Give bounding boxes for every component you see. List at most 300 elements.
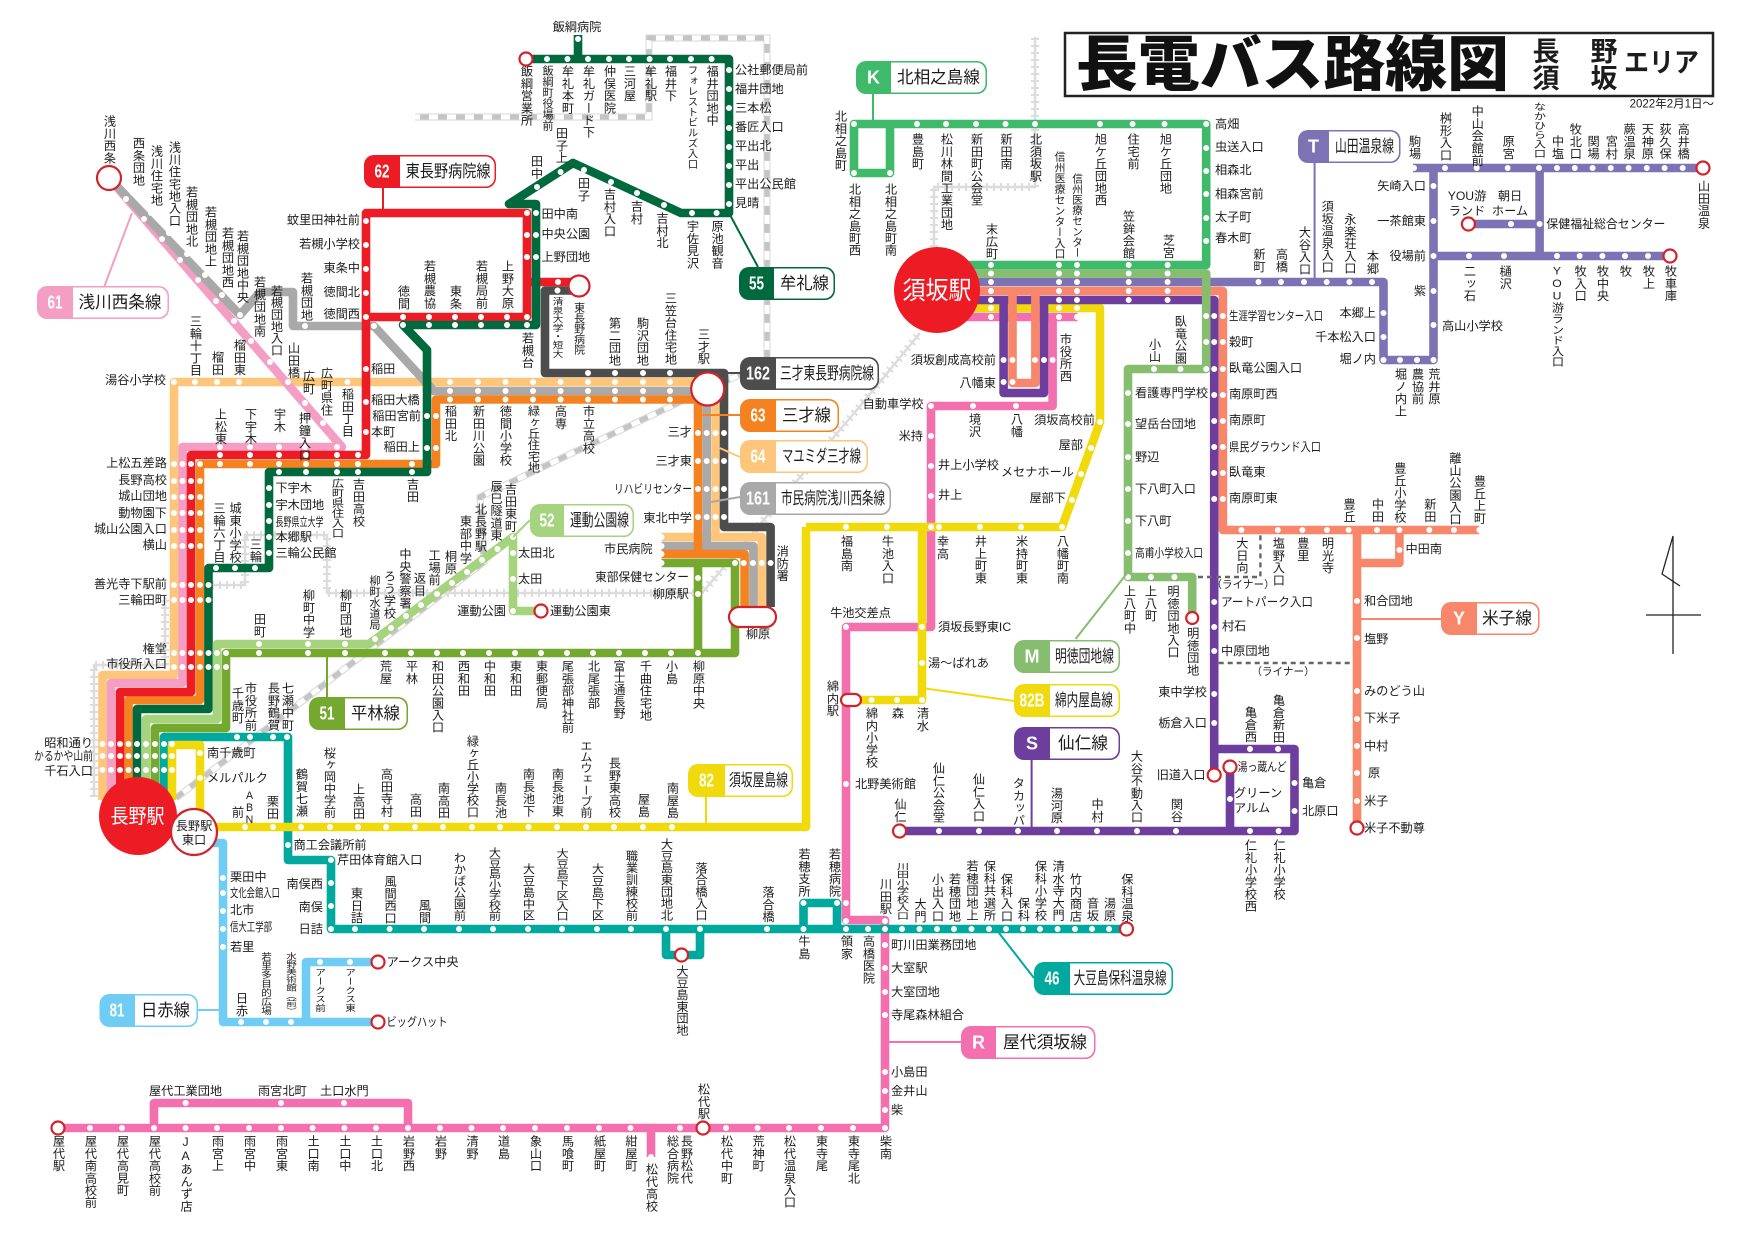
labels: 三才 band: 三才東 [655,454,692,468]
stop labels S: 中原団地 [1221,643,1270,658]
labels: 51: 平林 [404,660,418,684]
labels: 81: 文化会館入口 [230,886,280,900]
pill 82 [688,764,793,827]
labels: 62: 上野大原 [500,260,514,309]
labels: trunk left: 城山団地 [118,489,167,503]
labels: 82: 鶴賀七瀬 [294,768,308,817]
labels: 三才 band: 緑ヶ丘住宅地 [526,405,540,473]
stop labels K: 豊島町 [910,133,924,170]
stop labels R: 土口中 [337,1135,352,1172]
labels: 三才 band [443,292,789,641]
labels: 46: 保科 [1016,897,1030,921]
line 61 [109,178,342,800]
labels: 51: 荒屋 [378,660,392,685]
routes converging on 三才 and 長野駅 [34,20,1173,1036]
route M: 明徳団地線 [991,274,1208,676]
labels: 46: 南俣 [299,899,323,914]
hub: 長野駅東口: 長野駅 [176,819,212,833]
labels: 55: 平出公民館 [735,177,796,191]
stop labels Y: 臥竜公園入口 [1229,361,1302,375]
stop labels Y: 豊里 [1295,537,1310,561]
area names: 野 [1590,37,1618,67]
stop labels K: 信州医療センター入口 [1053,150,1065,259]
stop labels M: 臥竜公園 [1173,315,1187,364]
labels: 46: 大豆島下区入口 [555,848,569,921]
stop labels Y: 県民グラウンド入口 [1229,440,1321,454]
labels: 55: 田中南 [542,206,578,221]
stops S [939,300,1294,831]
stop labels Y: 中田 [1370,497,1384,522]
labels: 82: 長野東高校 [607,757,621,819]
stop labels T: 天神原 [1640,123,1654,160]
labels: 55: 吉田高校 [351,478,365,527]
stop labels R: 須坂長野東IC [938,620,1011,634]
stop labels T: YOU游ランド入口 [1550,265,1564,367]
stop labels R: 東寺尾 [814,1135,828,1172]
pill 63 [698,399,839,432]
pill 82B: 82B [1020,690,1044,710]
labels: 52: 太田 [518,571,542,586]
labels: 46: 大豆島東団地 [674,965,689,1036]
labels: 51: 富士通長野 [612,660,626,719]
labels: 52: 柳町団地 [338,589,352,638]
stop labels R: 長野松代 [679,1135,693,1184]
stop labels R: 寺尾森林組合 [891,1007,964,1022]
labels: 52: 太田北 [518,545,555,560]
stop labels K [833,110,1264,260]
hub: 長野駅東口 [171,809,217,855]
labels: 三才 band: 東北中学 [643,510,692,525]
stops T [991,168,1683,360]
stop labels T: 荒井原 [1426,368,1441,405]
labels: 81: 若里多目的広場 [260,951,272,1016]
stop labels T: 一茶館東 [1377,214,1426,228]
stop labels T: 堀ノ内上 [1393,367,1407,417]
stop labels K: 北須坂駅 [1028,133,1042,182]
stop labels R: 土口北 [369,1135,383,1172]
stop labels R: 自動車学校 [863,396,924,411]
labels: 三才 band: 東長野病院 [573,302,585,355]
labels: 51: 市役所前 [243,682,257,731]
stop labels R: 屋代駅 [51,1135,65,1172]
line 62 [120,213,579,800]
stop labels R: 大室駅 [891,961,928,975]
labels: 三才 band: 柳原駅 [652,587,689,601]
labels: 82: メルパルク [207,771,268,785]
stop labels R: 松代温泉入口 [782,1135,796,1208]
stop labels K: 信州医療センター [1071,172,1083,258]
labels: 62: 稲田宮前 [372,408,421,423]
labels: 61 and 161: 若槻団地上 [203,205,217,267]
stop labels T: 蕨温泉 [1622,123,1636,160]
stop labels R: 屋代高校前 [147,1135,161,1196]
labels: 62: 徳間 [396,284,410,309]
stop labels M: 小山 [1147,338,1161,362]
stop labels 82B: 湯〜ばれあ [928,656,989,670]
stops on 三才 band [174,282,771,594]
stop labels Y: 離山公園入口 [1448,452,1462,525]
line K [854,124,1206,265]
pill 55: 牟礼線 [780,274,829,293]
stop labels R: 紺屋町 [624,1135,638,1172]
stop labels R: 総合病院 [665,1134,679,1184]
labels: 55: 若槻台 [520,331,534,369]
stop labels M: 上八町 [1143,585,1157,622]
labels: 46: 芹田体育館入口 [337,852,422,867]
labels: 82: 南屋島 [665,781,679,819]
stop labels Y: 新田 [1422,498,1436,522]
labels: 82: 上高田 [351,783,365,820]
stop labels T: 駒場 [1407,135,1421,160]
labels: 55: 吉村 [629,200,643,224]
route R: 屋代須坂線 [51,317,1096,1212]
labels: 82: 幸高 [935,535,949,559]
labels: 52: 柳町中学 [301,589,315,638]
stop labels Y: 米子不動尊 [1364,820,1425,835]
labels: 61 and 161 [102,115,354,437]
stop labels T: 樋沢 [1498,265,1512,290]
stop labels T: 紫 [1414,284,1426,298]
labels: 46: 落合橋入口 [694,862,708,921]
stop labels T: 山田温泉 [1696,180,1710,229]
stop labels T: 高山小学校 [1442,318,1503,333]
labels: 82: 須坂高校前 [1034,412,1095,427]
labels: 82: 八幡町南 [1055,535,1069,584]
labels: 55: 田子上 [554,127,568,164]
liner dashed links [1198,533,1353,663]
stop labels Y: 中村 [1364,738,1388,753]
labels: 82: 南長池 [493,781,507,819]
pill 55 [729,213,835,300]
pill 82B [922,684,1120,717]
pill 61 [37,213,169,319]
area names [1532,37,1699,94]
stops on shared trunk [102,464,226,770]
stop labels T: 牧 [1618,265,1632,278]
stop labels R [51,333,1072,1212]
labels: 51: 東郵便局 [534,660,548,709]
pill 51 [309,653,408,730]
labels: 51: 中和田 [482,659,496,697]
stop labels T: 牧北口 [1568,123,1582,160]
stop labels T: なかひら入口 [1532,102,1546,158]
line 46 [164,737,1126,955]
stop labels Y: 塩野 [1364,631,1388,646]
stop labels T: 千本松入口 [1315,330,1376,344]
stops 52 and 51 [259,537,698,653]
labels: 61 and 161: 広町 [301,370,315,394]
line 82 upper [806,308,1100,527]
stops 81 [223,878,350,1022]
stop labels T: ホーム [1492,204,1528,218]
stop labels 82B [864,656,989,769]
pill T: 山田温泉線 [1335,137,1394,156]
labels: 三才 band: 第二団地 [607,317,621,366]
stop labels M: 下八町入口 [1135,482,1196,496]
area names: 長 [1532,37,1560,67]
stops 62 [220,213,527,455]
labels: 55: 飯綱町役場前 [541,65,554,132]
labels: 82: 福島南 [839,534,853,572]
pill 64: マユミダ三才線 [782,447,861,466]
stop labels K: 新田町公会堂 [969,133,983,206]
labels: 62: 若槻農協 [422,259,436,309]
stop labels R: 雨宮東 [274,1135,288,1172]
labels: 51: 和田公園入口 [430,660,444,733]
pill 46: 46 [1044,968,1060,988]
labels: trunk left: 動物園下 [118,506,167,520]
stop labels S: 仙仁公会堂 [931,762,945,823]
labels: 46: 風間 [417,899,431,923]
labels: 三才 band: 高専 [553,405,567,429]
stops on 61 and 161 diagonals [126,193,374,447]
stop labels R: 市役所西 [1058,333,1072,382]
stop labels Y: 生涯学習センター入口 [1229,308,1323,323]
labels: 三才 band: 駒沢団地 [635,317,649,366]
stop labels R: 井上 [938,488,962,502]
hub: 長野駅 [99,777,177,855]
stop labels S: 大谷不動入口 [1129,750,1143,823]
stop labels R: 金井山 [891,1084,928,1098]
stop labels R: 岩野西 [401,1134,415,1172]
labels: 55: 福井下 [663,64,677,102]
stop labels Y: （ライナー） [1251,665,1315,678]
stop labels T: ランド [1449,204,1485,218]
labels: 52 [252,480,611,638]
pill R [885,1026,1096,1059]
labels: 55: 中央公園 [542,226,590,241]
title heading: 長電バス路線図 [1076,32,1509,98]
labels: 82: 桜ヶ岡中学前 [322,747,336,818]
stop labels R: 荒神町 [751,1135,765,1172]
stop labels Y: みのどう山 [1364,684,1425,698]
stop labels M: 望岳台団地 [1135,416,1196,431]
stop labels R: 東寺尾北 [846,1135,860,1184]
labels: 46: 風間西口 [383,875,397,924]
stop labels S: タカッパ [1011,777,1025,826]
stop labels R: 雨宮中 [242,1135,256,1172]
labels: 82: 屋島 [636,793,650,818]
labels: 46: 保科共選所 [982,860,996,921]
labels: 55: 田子 [576,177,590,202]
labels: 46: 職業訓練校前 [624,850,638,921]
route 82B: 綿内屋島線 [864,627,1120,769]
labels: 52: ろう学校 [382,570,396,619]
stop labels R: 象山口 [528,1135,542,1172]
labels: trunk left: 横山 [143,538,167,552]
labels: 61 and 161: 若槻団地北 [184,185,198,248]
stop labels R: 道島 [496,1135,510,1160]
pill 81: 81 [110,1000,124,1020]
pill K [856,61,987,124]
stops 46 [237,737,1109,929]
line 52 [146,537,541,800]
pill R: R [972,1032,985,1052]
pill 161: 市民病院浅川西条線 [781,489,885,508]
stops 82B [872,627,922,700]
labels: 55: 平出 [735,158,759,172]
labels: trunk left: 上松五差路 [106,455,167,470]
labels: trunk left: 昭和通り [44,736,93,750]
labels: 51: 北尾張部 [586,660,600,709]
pill 51: 平林線 [351,704,400,723]
stops R [90,317,1077,1157]
stop labels R: 綿内駅 [825,680,839,717]
pill 162: 162 [746,364,770,384]
labels: 46: 若穂支所 [796,847,811,897]
stop labels S: アルム [1234,801,1270,815]
labels: trunk left: 宇木 [272,408,286,432]
labels: 61 and 161: 三輪十丁目 [188,315,202,376]
stop labels M: 看護専門学校 [1135,385,1208,400]
line Y [937,291,1479,828]
stops K [854,124,1206,265]
stop labels T: 本郷 [1365,250,1379,274]
labels: 55: 吉村入口 [602,188,616,237]
stop labels K: 高畑 [1215,117,1239,131]
pill 62: 62 [374,162,390,182]
stop labels K: 芝宮 [1161,234,1175,258]
stop labels T: 牧上 [1641,265,1655,289]
labels: trunk left: 城山公園入口 [94,522,167,536]
stop labels K: 末広町 [984,223,998,260]
stop labels T: 中塩 [1550,134,1564,159]
labels: 46: 竹内商店 [1068,873,1082,922]
stop labels T: 永楽荘入口 [1342,213,1356,274]
stop labels T: 高橋 [1274,248,1288,273]
labels: 46: わかば公園前 [452,852,466,921]
labels: 55: 番匠入口 [735,120,784,134]
labels: 62: 稲田大橋 [371,393,420,407]
stop labels Y: 穀町 [1229,335,1253,349]
stop labels S: 八幡東 [959,375,996,390]
stop labels Y: 南原町西 [1229,386,1278,401]
stop labels Y: 下米子 [1364,711,1401,725]
labels: 46: 小出入口 [930,873,944,922]
stop labels T: 堀ノ内 [1339,351,1376,366]
labels: 82: 南高田 [436,781,450,819]
labels: 46: 大豆島東団地北 [659,838,673,922]
labels: 46: 高橋医院 [861,935,875,984]
labels: 82: 高田寺村 [379,768,393,817]
labels: 82: 南長池下 [521,767,535,817]
labels: 46: 大豆島小学校前 [487,847,501,921]
stop labels S [892,352,1339,912]
stop labels M: 明徳団地 [1185,627,1199,676]
stop labels M: 明徳団地入口 [1166,585,1180,658]
stop labels R: 紙屋町 [592,1135,606,1172]
line T [937,168,1703,360]
labels: 46: 保科温泉 [1120,873,1134,922]
stop labels R: 土口南 [306,1135,320,1172]
stop labels Y: 臥竜東 [1229,465,1266,479]
labels: 55: 三本松 [735,101,772,115]
stop labels K: 旭ケ丘団地 [1158,133,1172,194]
pill 82: 82 [699,770,714,790]
labels: 55: 吉田 [405,478,419,502]
labels: 46: 湯原 [1102,897,1116,921]
labels: 52: 北長野駅 [473,503,487,552]
labels: 81: 信大工学部 [230,919,272,934]
labels: 51: 東和田 [508,660,522,697]
labels: 46: 牛島 [796,934,811,960]
labels: 82: 米持町東 [1014,535,1028,584]
stop labels S: 湯っ蔵んど [1238,760,1287,774]
labels: trunk left: 押鐘入口 [297,412,311,461]
stop labels S: 北原口 [1302,804,1339,818]
pill 64 [720,440,868,473]
pill S: 仙仁線 [1058,734,1108,753]
stops 55 [216,39,729,568]
labels: 52: 工場前 [427,549,441,586]
labels: 三才 band: 三才駅 [696,328,710,365]
line 161 [109,178,753,607]
stop labels R: 米持 [899,428,923,443]
stop labels K: 旭ケ丘団地西 [1093,133,1107,206]
stop labels T: 大谷入口 [1297,226,1311,275]
line 63 [128,400,745,800]
stops Y [991,291,1479,801]
labels: 61 and 161: 広町県住 [319,367,333,416]
labels: 55: 原池観音 [710,220,724,269]
stop labels R: 雨宮上 [210,1135,224,1172]
labels: 46: 大豆島下区 [590,863,604,921]
labels: 62: 徳間西 [323,306,360,321]
stop labels T: 牧入口 [1573,265,1587,302]
labels: trunk left: 善光寺下駅前 [94,576,167,591]
labels: 46: 保科小学校 [1033,860,1047,922]
stop labels S: 仁礼小学校西 [1243,839,1257,912]
line 55 [137,35,729,800]
stop labels T: 役場前 [1389,248,1426,263]
labels: 81: 北市 [230,903,254,917]
stop labels S: 須坂創成高校前 [911,352,996,367]
stop labels R: 牛池交差点 [830,605,891,620]
labels: 55: 見晴 [735,196,759,210]
labels: 51: 千歳町 [230,687,244,724]
labels: 55 [212,20,808,564]
stop labels R: 柴南 [878,1135,892,1159]
stop labels R: 北野美術館 [855,776,916,791]
labels: 52: 返目 [412,572,426,596]
stop labels 82B: 綿内小学校 [864,707,878,769]
pill S: S [1026,734,1038,754]
labels: 62 [287,212,514,454]
pill 51: 51 [320,704,334,724]
labels: 三才 band: 東部保健センター [595,570,689,584]
labels: 55: 上野団地 [542,250,590,264]
pill 162: 三才東長野病院線 [780,364,874,383]
labels: 81 [230,869,459,1029]
stop labels T: 須坂温泉入口 [1320,200,1334,273]
stop labels R: 土口水門 [320,1084,369,1098]
pill T [1298,130,1400,282]
stop labels T: 牧車庫 [1663,265,1677,302]
labels: 46: 領家 [839,935,853,960]
stop labels K: 相森北 [1215,162,1252,177]
stop labels T [1252,102,1710,417]
stop labels Y: 米子 [1364,794,1388,808]
pill 61: 61 [48,292,62,312]
stop labels S: アートパーク入口 [1221,595,1313,609]
icon: compass north marker [1646,536,1701,654]
stop labels Y: 豊丘小学校 [1392,462,1406,524]
stop labels T: 宮村 [1604,134,1618,159]
labels: 51: 小島 [664,660,678,685]
labels: 55: 公社郵便局前 [735,62,808,77]
labels: 46: 大豆島中区 [521,863,535,921]
labels: 55: 広町県住入口 [330,478,344,538]
